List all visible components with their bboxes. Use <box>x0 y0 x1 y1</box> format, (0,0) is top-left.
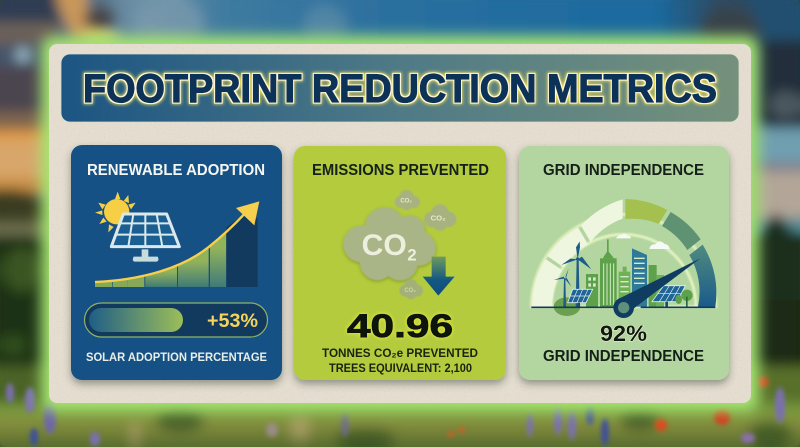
icon: sun <box>95 192 136 232</box>
main paper panel <box>49 44 751 403</box>
icon: solar panels <box>568 286 685 307</box>
icon: solar panel <box>111 214 179 262</box>
large cloud: 2 <box>407 246 417 265</box>
icon: clouds <box>616 234 670 249</box>
large cloud <box>343 207 436 280</box>
small cloud right: CO₂ <box>431 213 446 222</box>
icon: city skyline <box>554 239 664 316</box>
gauge glow <box>531 214 716 307</box>
right sky bands <box>752 0 800 40</box>
caption: tonnes prevented: TONNES CO₂e PREVENTED <box>322 346 478 360</box>
gauge <box>531 199 716 318</box>
title: FOOTPRINT REDUCTION METRICS <box>83 67 717 111</box>
wildflowers <box>6 376 785 446</box>
progress bar <box>84 303 268 337</box>
small cloud bottom: CO₂ <box>404 288 416 294</box>
small cloud top: CO₂ <box>400 199 412 205</box>
bars <box>95 227 226 287</box>
chart: solar panel and growth curve <box>95 192 259 287</box>
arrow: down <box>423 257 455 296</box>
caption: solar adoption percentage: SOLAR ADOPTION PERCENTAGE <box>86 350 267 364</box>
heading: renewable adoption: RENEWABLE ADOPTION <box>87 162 265 179</box>
panel: emissions prevented <box>294 146 506 380</box>
ground line <box>531 305 715 310</box>
title banner <box>61 54 739 122</box>
meadow <box>0 403 800 447</box>
panel: grid independence <box>519 146 729 380</box>
needle <box>613 258 700 318</box>
value: +53%: +53% <box>207 311 258 332</box>
value: 92%: 92% <box>600 321 647 346</box>
left sky bands <box>0 0 60 22</box>
panel glow <box>41 36 759 411</box>
caption: trees equivalent: TREES EQUIVALENT: 2,100 <box>329 363 472 375</box>
value: 40.96: 40.96 <box>347 308 453 344</box>
top clouds <box>55 0 110 44</box>
panel: renewable adoption <box>71 145 282 380</box>
large cloud: CO <box>362 229 407 262</box>
icon: wind turbines <box>554 241 591 307</box>
arrow: growth curve <box>95 201 259 282</box>
heading: grid independence: GRID INDEPENDENCE <box>543 162 704 179</box>
heading: emissions prevented: EMISSIONS PREVENTED <box>312 162 489 179</box>
icon: trees <box>675 290 693 307</box>
icon: CO2 clouds <box>343 190 456 299</box>
gauge segments <box>532 199 716 307</box>
caption: grid independence: GRID INDEPENDENCE <box>543 348 704 365</box>
